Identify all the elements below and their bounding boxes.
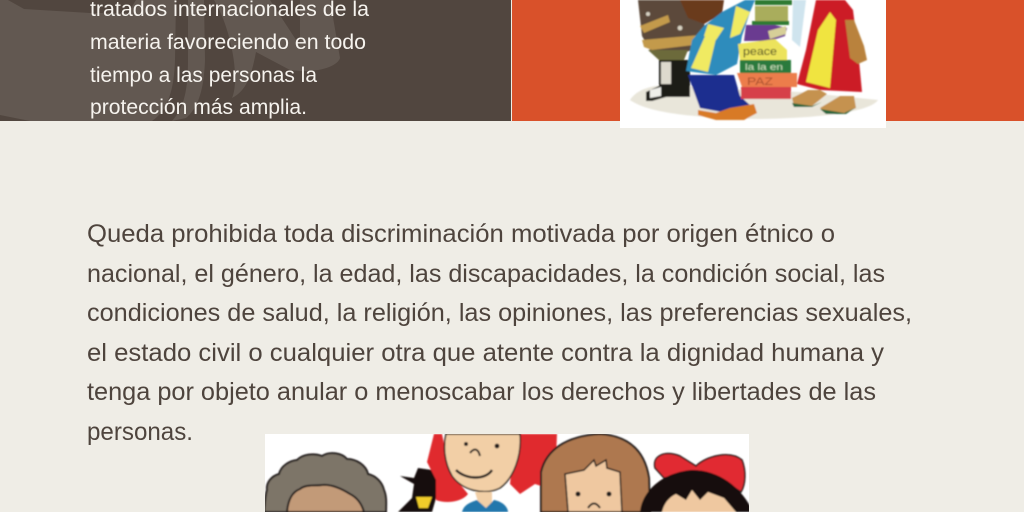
text block: panel paragraph: materia favoreciendo en todo <box>90 31 366 54</box>
book labels: PAZ <box>747 76 773 88</box>
ground shadow <box>630 85 878 119</box>
text block: panel paragraph: tiempo a las personas la <box>90 64 317 87</box>
figure: child in blue jacket <box>680 0 757 120</box>
panel: dark brown text panel <box>0 0 511 121</box>
illustration: group of children <box>264 434 750 512</box>
text block: main paragraph: tenga por objeto anular o menoscabar los derechos y libertades de las <box>87 378 876 406</box>
text block: panel paragraph: protección más amplia. <box>90 96 307 119</box>
figure: dark pigtail child <box>398 467 438 512</box>
text block: main paragraph: el estado civil o cualquier otra que atente contra la dignidad humana y <box>87 339 884 367</box>
text block: main paragraph: personas. <box>87 418 193 446</box>
text block: panel paragraph <box>90 0 369 119</box>
figure: child in red robe <box>792 0 867 114</box>
text block: main paragraph: condiciones de salud, la religión, las opiniones, las preferencias sexuales, <box>87 299 912 327</box>
illustration: children with books of peace <box>620 0 886 128</box>
figure: red-haired child <box>427 434 557 512</box>
figure: brown-haired child <box>541 434 650 512</box>
book labels <box>743 46 783 88</box>
text block: main paragraph: Queda prohibida toda discriminación motivada por origen étnico o <box>87 220 835 248</box>
text block: main paragraph <box>87 220 912 446</box>
book labels: peace <box>743 46 777 58</box>
book labels: la la en <box>745 62 783 72</box>
text block: main paragraph: nacional, el género, la edad, las discapacidades, la condición social, las <box>87 260 885 288</box>
figure: child in brown coat <box>638 0 706 101</box>
figure: child with grey curly hair <box>264 453 386 512</box>
figure: child with red bow <box>640 454 750 512</box>
figure: book stack <box>737 0 797 99</box>
panel: orange panel <box>512 0 1024 121</box>
